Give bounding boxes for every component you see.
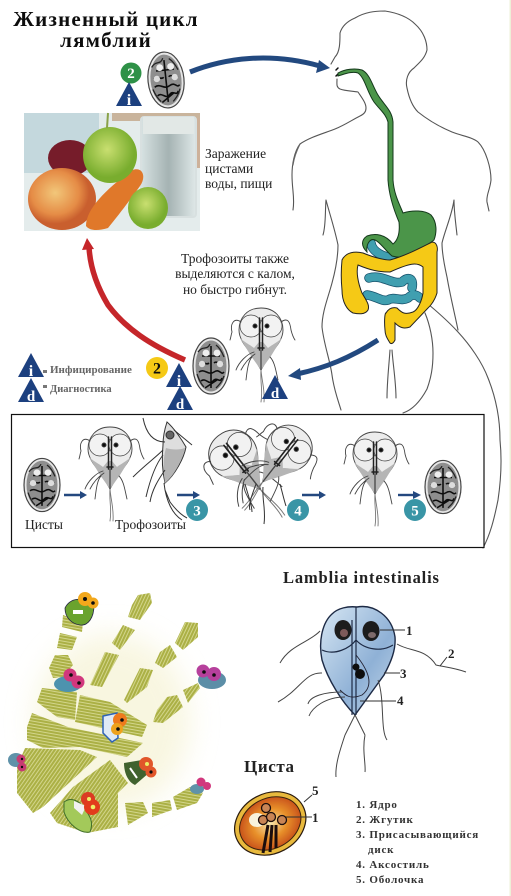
stage: cyst formed [425, 460, 461, 514]
excreted stages: cyst, trophozoite, markers: d [176, 397, 185, 413]
excreted stages: cyst, trophozoite, markers: d [271, 386, 280, 402]
number 5: 5 [411, 504, 419, 520]
text: trophozoites also shed: но быстро гибнут. [183, 282, 287, 297]
diagram: cyst with labels: 1 [312, 810, 318, 825]
germ: green on finger [65, 592, 98, 625]
arrow 2 [177, 491, 200, 499]
germ: pink, thumb [190, 778, 211, 794]
digestive tract: small intestine [367, 243, 420, 300]
germ: pink, left edge [8, 753, 26, 772]
legend: infection and diagnosis: i [29, 363, 34, 380]
legend list: 4. Аксостиль [356, 859, 430, 871]
excreted stages: cyst, trophozoite, markers: i [177, 373, 182, 390]
arrow 1 [64, 491, 87, 499]
digestive tract: oesophagus and stomach [338, 69, 436, 257]
excreted stages: cyst, trophozoite, markers [146, 308, 295, 413]
legend list: диск [368, 844, 394, 856]
illustration: hand print with germs [8, 592, 226, 833]
text: infection by cysts: Заражение [205, 146, 266, 161]
text: infection by cysts: воды, пищи [205, 176, 272, 191]
diagram: cyst with labels [223, 780, 319, 867]
diagram: cyst with labels: 5 [312, 783, 319, 798]
label: trophozoites: Трофозоиты [115, 517, 186, 532]
legend: infection and diagnosis: Диагностика [50, 384, 112, 395]
stage 2 marker: cyst, infection: 2 [127, 66, 135, 82]
heading: Lamblia intestinalis: Lamblia intestinalis [283, 568, 440, 587]
number 3: 3 [193, 504, 201, 520]
diagram: Lamblia trophozoite with labels: 1 [406, 623, 412, 638]
photo: fruit, carrot and glass of water [24, 113, 200, 231]
stage 2 marker: cyst, infection: i [127, 92, 132, 109]
legend: infection and diagnosis: Инфицирование [50, 364, 132, 376]
legend list: 3. Присасывающийся [356, 829, 479, 841]
germ: purple on blue, right finger [196, 664, 226, 689]
legend list: 2. Жгутик [356, 814, 414, 826]
title: Жизненный цикл [13, 7, 199, 31]
legend list: 1. Ядро [356, 799, 398, 811]
legend: infection and diagnosis [18, 353, 132, 405]
digestive tract: colon [341, 242, 437, 344]
arrow 3 [302, 491, 326, 499]
legend: infection and diagnosis: d [27, 389, 36, 405]
stage: dividing trophozoites [192, 410, 331, 538]
human body outline [292, 11, 501, 548]
legend list [356, 799, 479, 886]
arrow 4 [398, 491, 421, 499]
number 4: 4 [294, 504, 302, 520]
germ: blue and white on palm [103, 713, 127, 742]
panel: cyst to trophozoite sequence [12, 410, 484, 548]
diagram: Lamblia trophozoite with labels: 2 [448, 646, 454, 661]
title [13, 7, 199, 52]
hand print [17, 593, 203, 833]
stage: cyst [24, 458, 63, 532]
number 4 [287, 499, 309, 521]
diagram: Lamblia trophozoite with labels [278, 607, 466, 777]
text: trophozoites also shed [175, 251, 295, 297]
page edge strip [510, 0, 511, 896]
excreted stages: cyst, trophozoite, markers: 2 [153, 360, 161, 378]
number 3 [186, 499, 208, 521]
germ: dark green on palm [124, 757, 156, 785]
blue arrow from body to excreted stage [288, 340, 378, 380]
text: infection by cysts: цистами [205, 161, 253, 176]
legend list: 5. Оболочка [356, 874, 424, 886]
germ: green and white on lower palm [64, 792, 100, 832]
title: лямблий [60, 28, 152, 52]
text: trophozoites also shed: Трофозоиты также [181, 251, 289, 266]
number 5 [404, 499, 426, 521]
stage 2 marker: cyst, infection [116, 50, 187, 110]
red arrow from cyst to food [82, 238, 185, 360]
diagram: Lamblia trophozoite with labels: 3 [400, 666, 407, 681]
stage: trophozoite front view [79, 427, 144, 521]
text: infection by cysts [205, 146, 272, 191]
germ: pink on blue, finger base [54, 668, 84, 692]
heading: cyst: Циста [244, 757, 295, 776]
stage: trophozoite [344, 432, 409, 526]
blue arrow to mouth [190, 58, 330, 73]
diagram: Lamblia trophozoite with labels: 4 [397, 693, 404, 708]
stage: cyst: Цисты [25, 517, 63, 532]
stage: trophozoite side view [133, 418, 192, 520]
text: trophozoites also shed: выделяются с калом, [175, 266, 295, 281]
